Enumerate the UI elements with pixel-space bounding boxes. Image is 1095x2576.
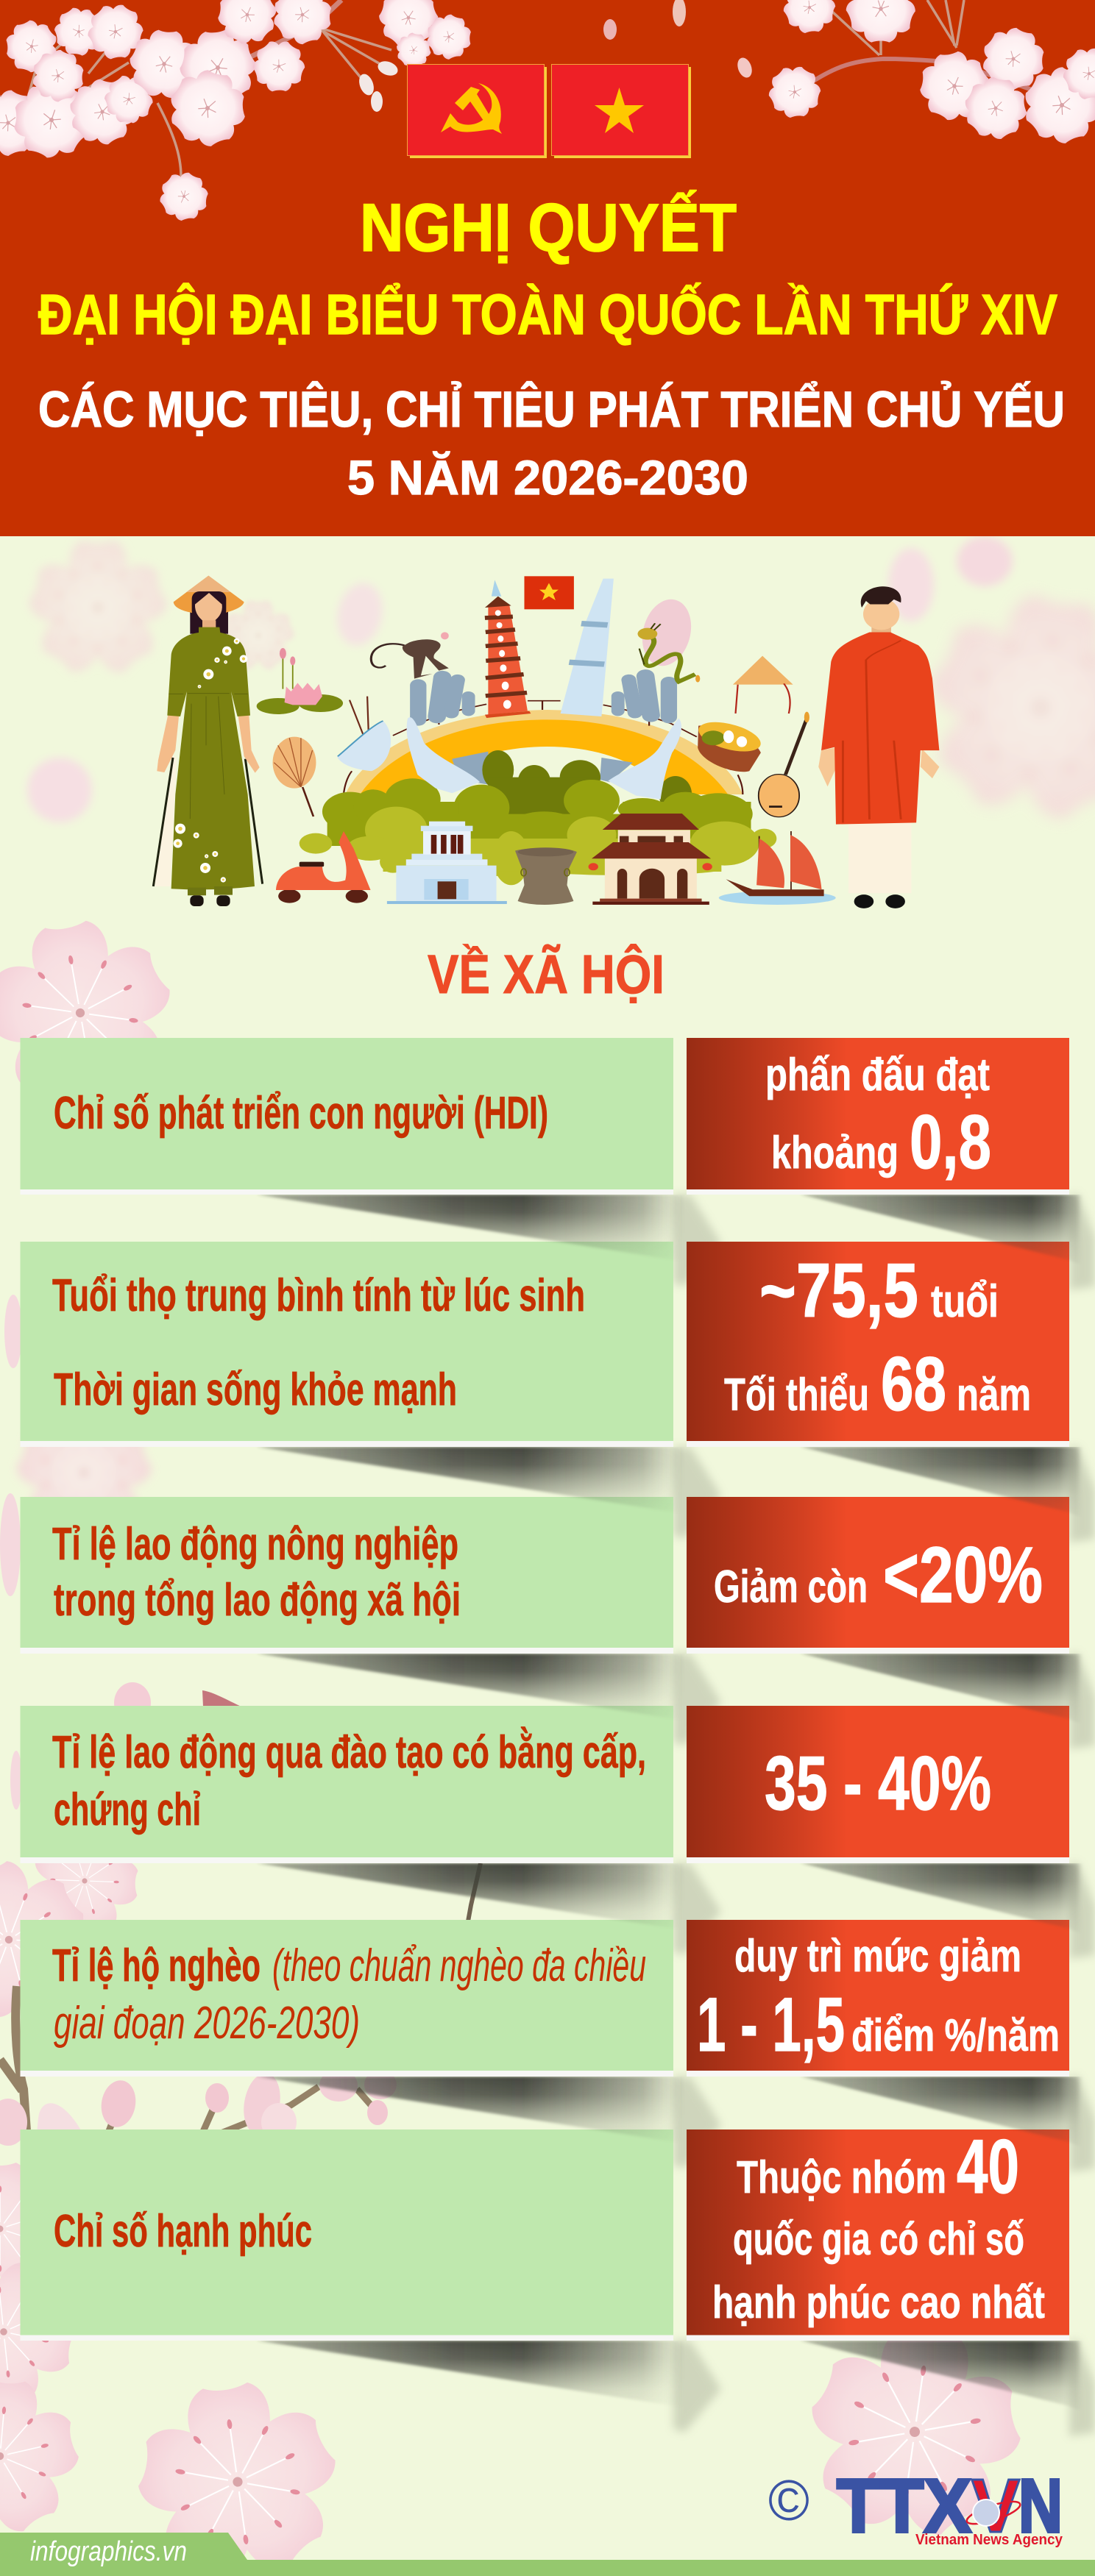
stone hand wrists bbox=[407, 717, 681, 800]
flag: communist party bbox=[408, 65, 547, 158]
value panel: tuổi bbox=[931, 1276, 999, 1327]
label panel bbox=[21, 1497, 673, 1648]
value panel bbox=[687, 1038, 1069, 1189]
value panel bbox=[687, 2124, 1069, 2335]
value panel: duy trì mức giảm bbox=[734, 1931, 1021, 1982]
label panel: Chỉ số phát triển con người (HDI) bbox=[54, 1088, 548, 1139]
dragon bbox=[637, 623, 700, 683]
label panel bbox=[21, 2130, 673, 2335]
label panel: giai đoạn 2026-2030) bbox=[54, 1998, 360, 2049]
mausoleum bbox=[387, 822, 507, 904]
copyright and ttxvn logo: N bbox=[1018, 2463, 1063, 2548]
value panel: 40 bbox=[957, 2124, 1019, 2210]
footer band bbox=[0, 2533, 1095, 2576]
label panel: Thời gian sống khỏe mạnh bbox=[54, 1365, 457, 1415]
right cherry blossom branch bbox=[735, 0, 1095, 155]
value panel: phấn đấu đạt bbox=[765, 1050, 990, 1100]
label panel: Tỉ lệ hộ nghèo bbox=[52, 1940, 261, 1991]
monkey bbox=[371, 632, 449, 679]
row 2: life expectancy bbox=[21, 1242, 1069, 1447]
value panel: Thuộc nhóm bbox=[737, 2152, 946, 2203]
label panel: Tỉ lệ lao động nông nghiệp bbox=[52, 1519, 458, 1570]
forest bbox=[300, 750, 776, 885]
label panel: Chỉ số hạnh phúc bbox=[54, 2206, 312, 2257]
value panel: Tối thiểu bbox=[724, 1370, 869, 1420]
noodle bowl bbox=[693, 716, 766, 772]
website text: infographics.vn bbox=[30, 2536, 187, 2567]
flag: vietnam bbox=[552, 65, 691, 158]
header band bbox=[0, 0, 1095, 536]
label panel bbox=[21, 1242, 673, 1441]
label panel bbox=[21, 1706, 673, 1857]
value panel bbox=[687, 1242, 1069, 1441]
title bbox=[38, 190, 1065, 505]
row 6: happiness index bbox=[21, 2124, 1069, 2341]
title: 5 NĂM 2026-2030 bbox=[347, 450, 748, 505]
illustration: landmarks bbox=[257, 576, 836, 905]
value panel: <20% bbox=[883, 1530, 1043, 1619]
copyright and ttxvn logo: Vietnam News Agency bbox=[915, 2532, 1063, 2548]
copyright and ttxvn logo: TTX bbox=[837, 2463, 971, 2548]
row 3: agricultural labour bbox=[21, 1497, 1069, 1654]
lotus bbox=[257, 648, 343, 714]
one pillar tower bbox=[485, 580, 531, 718]
section heading: VỀ XÃ HỘI bbox=[428, 944, 665, 1005]
illustration: vietnam culture scene bbox=[153, 576, 939, 908]
junk boat bbox=[719, 831, 836, 905]
rainbow bridge bbox=[344, 701, 743, 794]
value panel: năm bbox=[957, 1370, 1031, 1420]
label panel bbox=[21, 1920, 673, 2071]
woman in ao dai bbox=[153, 576, 263, 906]
soft wedges between cards bbox=[673, 1195, 1095, 2436]
value panel: ~75,5 bbox=[759, 1248, 918, 1334]
value panel: 35 - 40% bbox=[765, 1741, 991, 1826]
rice bowl bbox=[337, 697, 391, 771]
row 4: trained labour bbox=[21, 1706, 1069, 1863]
value panel: 68 bbox=[881, 1342, 946, 1427]
label panel: (theo chuẩn nghèo đa chiều bbox=[272, 1940, 646, 1991]
copyright and ttxvn logo: V bbox=[971, 2463, 1020, 2548]
value panel bbox=[687, 1706, 1069, 1857]
hand fan bbox=[273, 737, 316, 816]
value panel: 0,8 bbox=[910, 1100, 991, 1185]
label panel: trong tổng lao động xã hội bbox=[54, 1575, 461, 1626]
label panel bbox=[21, 1038, 673, 1189]
skyscraper bbox=[561, 579, 614, 716]
row 1: HDI bbox=[21, 1038, 1069, 1195]
bronze drum bbox=[515, 847, 577, 905]
value panel: 1 - 1,5 bbox=[697, 1982, 845, 2068]
value panel: Giảm còn bbox=[714, 1562, 868, 1612]
row 5: poverty rate bbox=[21, 1920, 1069, 2077]
flag on scene bbox=[524, 576, 574, 609]
temple bbox=[589, 814, 712, 905]
scooter bbox=[276, 831, 371, 903]
label panel: chứng chỉ bbox=[54, 1785, 201, 1835]
card drop shadows bbox=[257, 1195, 1082, 2412]
value panel bbox=[687, 1497, 1069, 1648]
background blossoms bbox=[0, 536, 1095, 2576]
value panel: khoảng bbox=[771, 1128, 899, 1178]
stone hands bbox=[410, 669, 677, 785]
man in ao dai bbox=[818, 586, 939, 908]
value panel bbox=[687, 1920, 1069, 2071]
conical hat with straps bbox=[733, 656, 793, 714]
left cherry blossom branch bbox=[0, 0, 686, 224]
copyright and ttxvn logo: © bbox=[768, 2468, 809, 2533]
copyright and ttxvn logo bbox=[768, 2463, 1063, 2548]
title: NGHỊ QUYẾT bbox=[360, 190, 737, 266]
label panel: Tỉ lệ lao động qua đào tạo có bằng cấp, bbox=[52, 1727, 646, 1778]
label panel: Tuổi thọ trung bình tính từ lúc sinh bbox=[52, 1270, 585, 1321]
moon lute bbox=[759, 712, 809, 817]
